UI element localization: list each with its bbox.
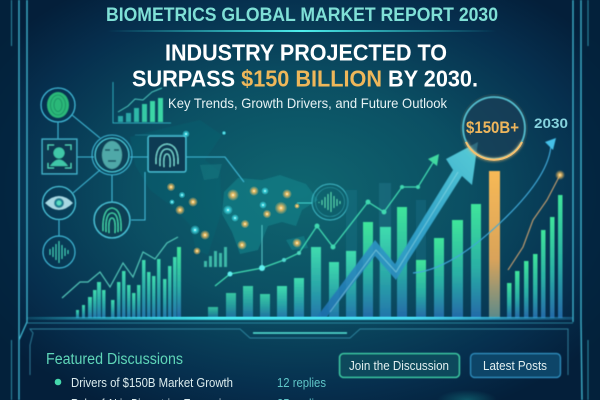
icon: face recognition circle — [92, 135, 132, 175]
button: latest posts — [470, 354, 560, 378]
subtitle: Key Trends, Growth Drivers, and Future Outlook — [168, 95, 448, 111]
world map — [130, 120, 318, 255]
discussion panel — [46, 351, 560, 400]
icon: eye circle — [42, 186, 76, 220]
discussion panel frame — [30, 329, 568, 375]
icon: fingerprint box — [148, 136, 186, 172]
headline line two: SURPASS $150 BILLION BY 2030. — [132, 66, 478, 92]
button: join the discussion — [340, 354, 460, 378]
header — [106, 5, 498, 111]
icon: voice wave circle center — [297, 184, 348, 220]
chart baseline — [27, 317, 573, 320]
right small bar chart — [507, 195, 562, 318]
headline line one: INDUSTRY PROJECTED TO — [165, 40, 447, 66]
title divider — [107, 30, 497, 32]
button: join the discussion: Join the Discussion — [349, 358, 449, 373]
big growth arrow — [316, 142, 478, 318]
button: latest posts: Latest Posts — [483, 358, 547, 373]
year label 2030: 2030 — [534, 115, 568, 131]
main bar chart — [208, 171, 500, 318]
orange trend curve — [508, 170, 565, 270]
callout: $150B+ badge: $150B+ — [466, 118, 519, 137]
network connectors — [58, 115, 244, 236]
left bar chart — [62, 237, 181, 318]
mini bar chart — [113, 82, 171, 123]
icon: fingerprint circle — [41, 88, 75, 122]
icon: voice wave circle — [43, 236, 75, 268]
report title: BIOMETRICS GLOBAL MARKET REPORT 2030 — [106, 5, 498, 26]
discussion row one: 12 replies — [277, 375, 326, 390]
trend line — [215, 154, 439, 286]
callout: $150B+ badge — [460, 94, 528, 162]
highlighted 2030 bar — [489, 171, 500, 318]
icon: fingerprint circle lower — [94, 202, 130, 238]
thin blue forecast arrow — [413, 138, 556, 273]
map location markers — [166, 130, 302, 255]
panel heading: Featured Discussions — [46, 351, 183, 368]
discussion row one: Drivers of $150B Market Growth — [71, 375, 233, 390]
icon: face scan box — [42, 139, 77, 174]
discussion row one — [55, 375, 326, 390]
small map chart — [204, 247, 227, 267]
